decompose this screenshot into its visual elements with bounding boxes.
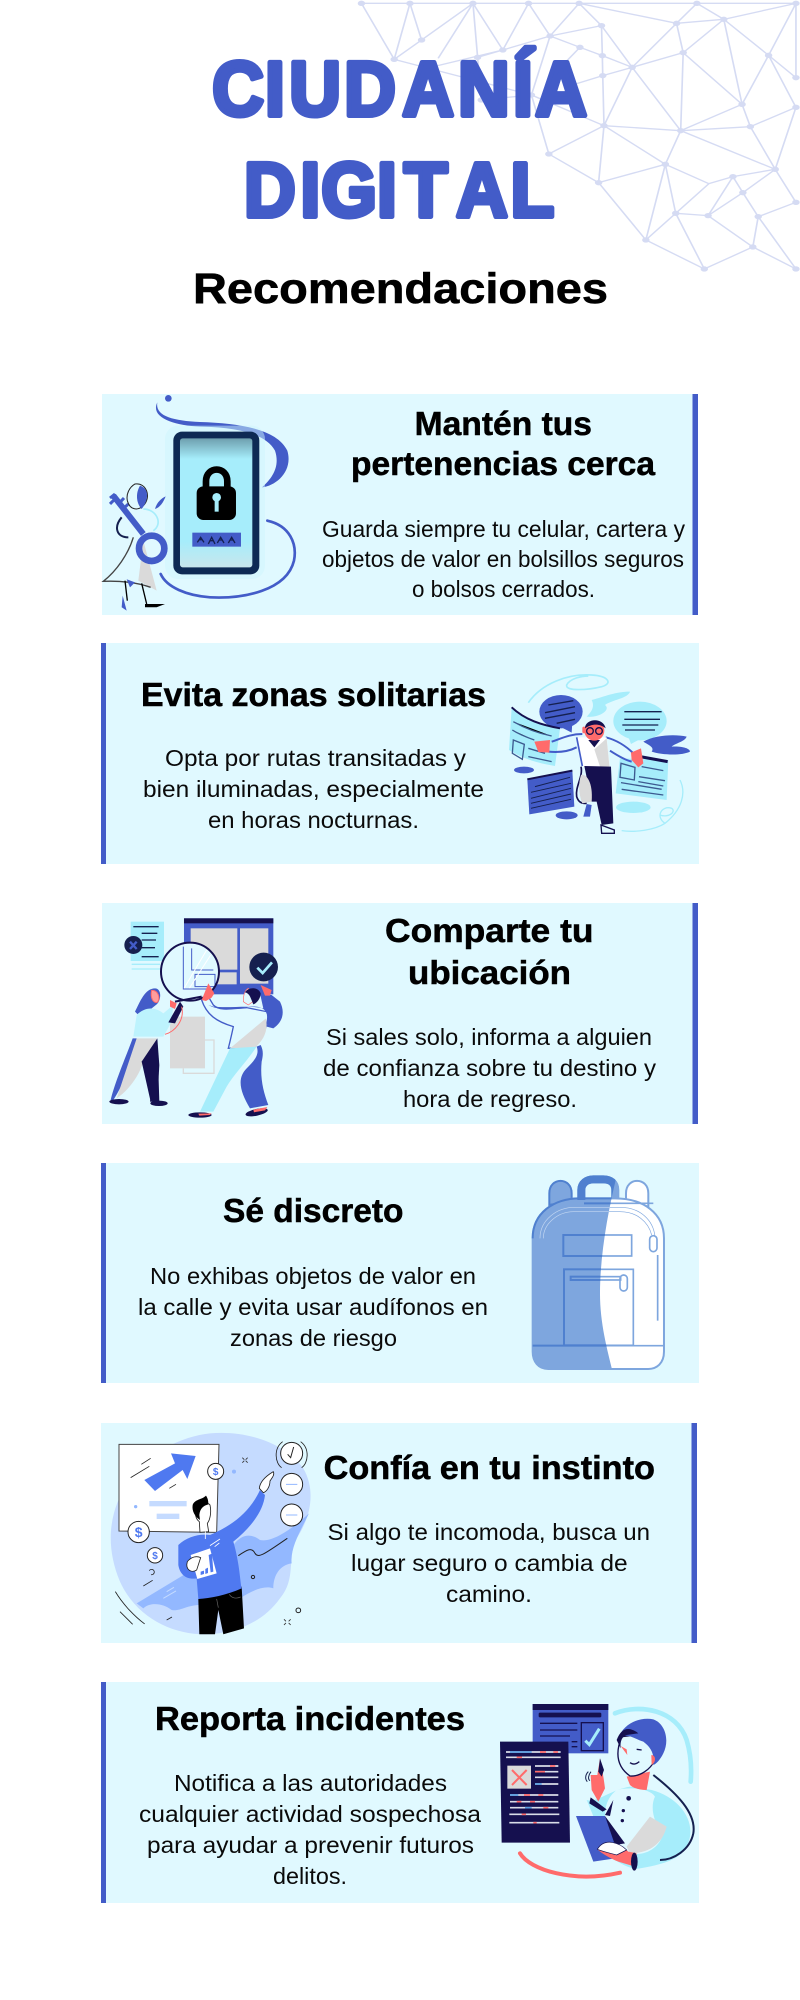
panel: Reporta incidentes (101, 1682, 699, 1903)
icon: man pointing at growth chart (111, 1433, 311, 1634)
body text (143, 745, 484, 833)
heading: Evita zonas solitarias (141, 676, 486, 713)
body text: Guarda siempre tu celular, cartera y (322, 516, 685, 542)
body text: hora de regreso. (403, 1086, 577, 1112)
body text: cualquier actividad sospechosa (139, 1801, 481, 1827)
title (212, 46, 587, 233)
body text: Si algo te incomoda, busca un (328, 1519, 650, 1545)
body text: o bolsos cerrados. (412, 576, 595, 602)
body text: zonas de riesgo (230, 1325, 397, 1351)
body text (323, 1024, 657, 1112)
body text: en horas nocturnas. (208, 807, 419, 833)
heading: pertenencias cerca (351, 445, 656, 482)
body text (139, 1770, 481, 1889)
icon: dollar coins: $ (152, 1551, 158, 1562)
heading: Comparte tu (385, 912, 594, 949)
heading: Reporta incidentes (155, 1700, 465, 1737)
icon: backpack (533, 1179, 664, 1369)
heading: Mantén tus (415, 405, 592, 442)
body text (328, 1519, 650, 1607)
heading: Confía en tu instinto (324, 1449, 655, 1486)
panel: Sé discreto (101, 1163, 699, 1383)
body text: Notifica a las autoridades (174, 1770, 447, 1796)
heading: Sé discreto (223, 1192, 404, 1229)
body text: Si sales solo, informa a alguien (326, 1024, 652, 1050)
body text: la calle y evita usar audífonos en (138, 1294, 488, 1320)
background network decoration (358, 1, 800, 272)
body text: lugar seguro o cambia de (351, 1550, 628, 1576)
subtitle: Recomendaciones (193, 265, 608, 313)
panel: Mantén tus pertenencias cerca (102, 394, 698, 615)
body text (138, 1263, 488, 1351)
heading (385, 912, 594, 991)
body text: delitos. (273, 1863, 347, 1889)
icon: person with documents and speech bubbles (509, 675, 690, 833)
body text: objetos de valor en bolsillos seguros (322, 546, 684, 572)
panel: Evita zonas solitarias (101, 643, 699, 864)
heading: ubicación (408, 954, 571, 991)
icon: people with magnifying glass and window (109, 918, 283, 1118)
body text: Opta por rutas transitadas y (165, 745, 467, 771)
body text: para ayudar a prevenir futuros (147, 1832, 474, 1858)
title: CIUDANÍA (212, 46, 587, 132)
icon: dollar coins: $ (135, 1524, 143, 1540)
body text: No exhibas objetos de valor en (150, 1263, 476, 1289)
heading (351, 405, 656, 482)
icon: phone with padlock and woman with key (103, 395, 295, 611)
icon: woman with documents and check mark (500, 1704, 694, 1876)
panel: Confía en tu instinto (101, 1423, 697, 1643)
body text: de confianza sobre tu destino y (323, 1055, 657, 1081)
icon: dollar coins (128, 1463, 224, 1563)
body text: camino. (446, 1581, 532, 1607)
body text (322, 516, 685, 602)
body text: bien iluminadas, especialmente (143, 776, 484, 802)
panel: Comparte tu ubicación (102, 903, 698, 1124)
icon: dollar coins: $ (213, 1467, 219, 1478)
title: DIGITAL (244, 147, 554, 233)
